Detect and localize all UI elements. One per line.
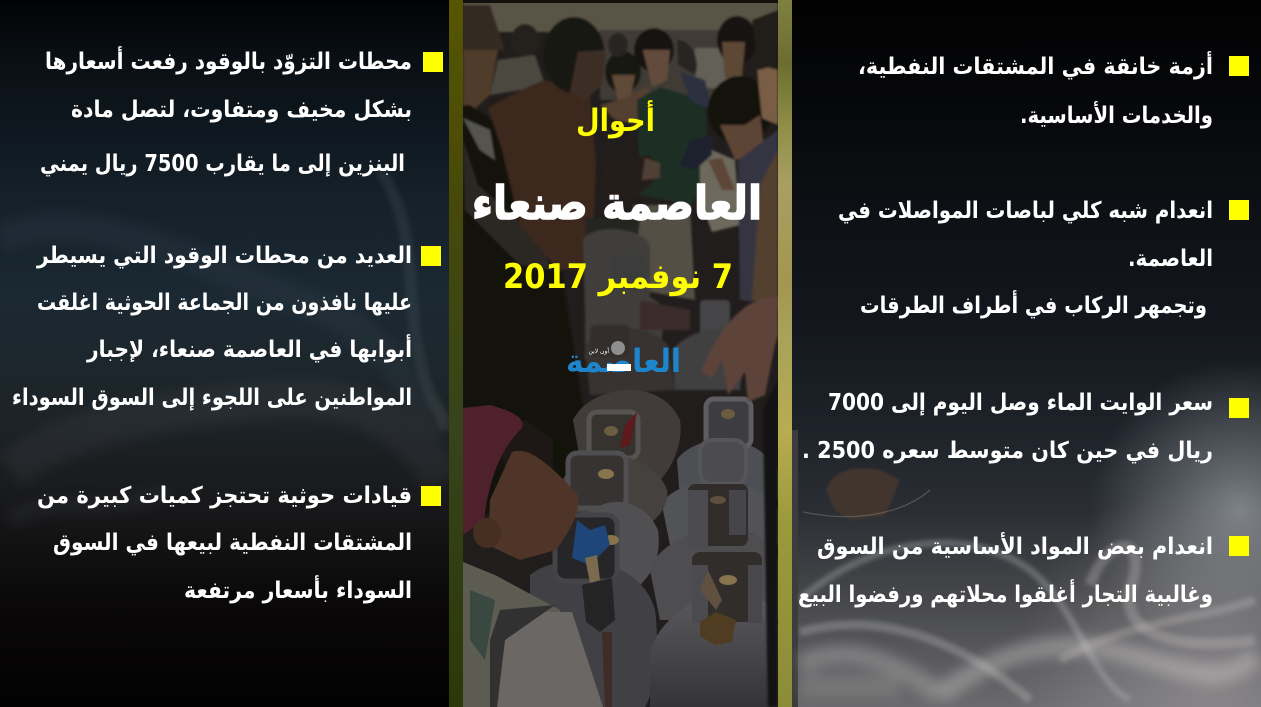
- heading: top label: أحوال: [576, 100, 655, 139]
- band: left olive stripe: [449, 0, 463, 707]
- panel: central photo of queue at gas cylinders: [463, 0, 778, 707]
- photo: wall and crowd: [463, 0, 778, 520]
- bullet item 2: العديد من محطات الوقود التي يسيطر: [36, 243, 412, 269]
- photo: boy in middle: [605, 51, 641, 93]
- photo: man in green: [634, 28, 674, 72]
- bullet item 2: أبوابها في العاصمة صنعاء، لإجبار: [86, 333, 412, 363]
- bullet item 2: وتجمهر الركاب في أطراف الطرقات: [860, 289, 1207, 319]
- photo: right column cylinders: [677, 440, 778, 500]
- logo: العاصمة: [566, 342, 681, 380]
- bullet item 2: عليها نافذون من الجماعة الحوثية اغلقت: [37, 290, 412, 316]
- heading: main title: العاصمة صنعاء: [472, 176, 762, 230]
- photo: trousers: [633, 205, 695, 300]
- photo: cylinders, upper rows: [583, 218, 745, 395]
- panel: left column bullets: [12, 45, 443, 604]
- bullet item 4: انعدام بعض المواد الأساسية من السوق: [817, 531, 1213, 560]
- bullet item 3: المشتقات النفطية لبيعها في السوق: [53, 530, 412, 556]
- top edge of photo: [463, 0, 778, 3]
- photo: reaching hand: [701, 297, 778, 707]
- bullet item 4: [798, 531, 1249, 608]
- logo: أون لاين: [588, 347, 609, 355]
- bullet item 1: بشكل مخيف ومتفاوت، لتصل مادة: [71, 97, 412, 123]
- photo: foreground cylinders: [530, 561, 657, 707]
- photo: boy with maroon head wrap: [463, 405, 603, 707]
- band: right olive stripe: [778, 0, 792, 707]
- panel: right background: [792, 76, 1261, 707]
- bullet item 2: انعدام شبه كلي لباصات المواصلات في: [838, 198, 1213, 224]
- panel: right column bullets: [798, 50, 1249, 608]
- bullet item 3: [37, 483, 441, 604]
- photo: background man in stripes: [513, 23, 537, 33]
- bullet item 1: [858, 50, 1249, 129]
- bullet item 2: المواطنين على اللجوء إلى السوق السوداء: [12, 385, 412, 411]
- bullet item 2: العاصمة.: [1128, 246, 1213, 272]
- bullet item 1: محطات التزوّد بالوقود رفعت أسعارها: [45, 45, 412, 75]
- photo: right men: [717, 16, 757, 64]
- bullet item 1: أزمة خانقة في المشتقات النفطية،: [858, 50, 1213, 80]
- bullet item 3: ريال في حين كان متوسط سعره 2500 .: [802, 438, 1213, 464]
- photo: central man: [488, 80, 596, 270]
- bullet item 3: السوداء بأسعار مرتفعة: [184, 574, 412, 604]
- bullet item 1: والخدمات الأساسية.: [1020, 100, 1213, 129]
- bullet item 2: [838, 198, 1249, 319]
- bullet item 2: [12, 243, 441, 411]
- heading: date: 7 نوفمبر 2017: [503, 257, 733, 297]
- photo: second-row left cylinder: [573, 390, 681, 480]
- bullet item 3: [802, 390, 1249, 464]
- photo: middle cylinders: [563, 458, 668, 521]
- bullet item 1: البنزين إلى ما يقارب 7500 ريال يمني: [40, 151, 405, 177]
- photo: left man: [463, 5, 505, 50]
- panel: left background: [0, 17, 449, 624]
- bullet item 3: سعر الوايت الماء وصل اليوم إلى 7000: [828, 390, 1213, 416]
- bullet item 3: قيادات حوثية تحتجز كميات كبيرة من: [37, 483, 412, 509]
- bullet item 1: [40, 45, 443, 177]
